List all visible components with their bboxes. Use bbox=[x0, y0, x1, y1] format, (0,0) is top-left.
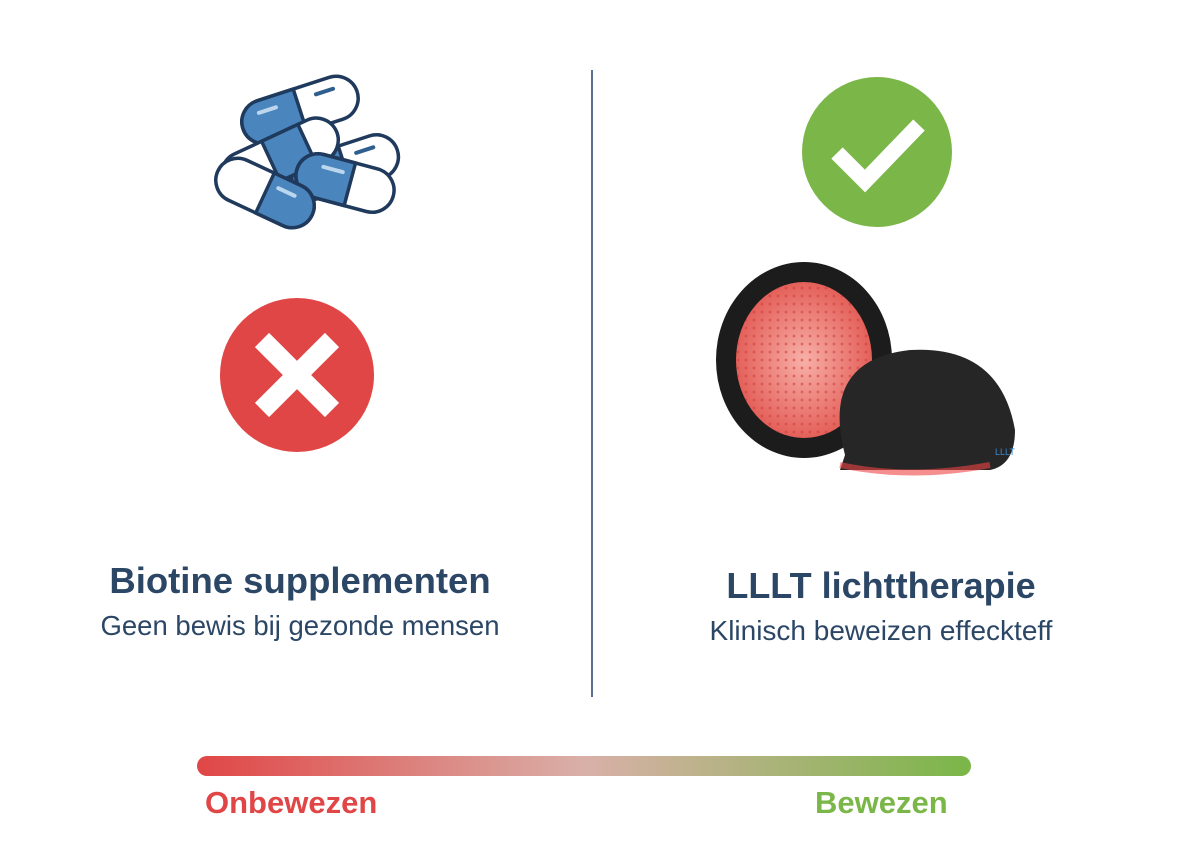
label: onbewezen: Onbewezen bbox=[205, 785, 377, 820]
text: biotine sub: Geen bewis bij gezonde mensen bbox=[100, 610, 500, 641]
label: bewezen: Bewezen bbox=[815, 785, 948, 820]
icon: red cross bbox=[220, 298, 374, 452]
text: lllt sub: Klinisch beweizen effeckteff bbox=[710, 615, 1052, 646]
image: LLLT helmets bbox=[716, 262, 1015, 476]
divider bbox=[591, 70, 593, 697]
icon: pills bbox=[214, 74, 400, 230]
gradient scale bar bbox=[197, 756, 971, 776]
image: LLLT helmets: LLLT bbox=[995, 447, 1015, 457]
icon: green check bbox=[802, 77, 952, 227]
heading: lllt: LLLT lichttherapie bbox=[726, 565, 1036, 606]
heading: biotine: Biotine supplementen bbox=[109, 560, 491, 601]
